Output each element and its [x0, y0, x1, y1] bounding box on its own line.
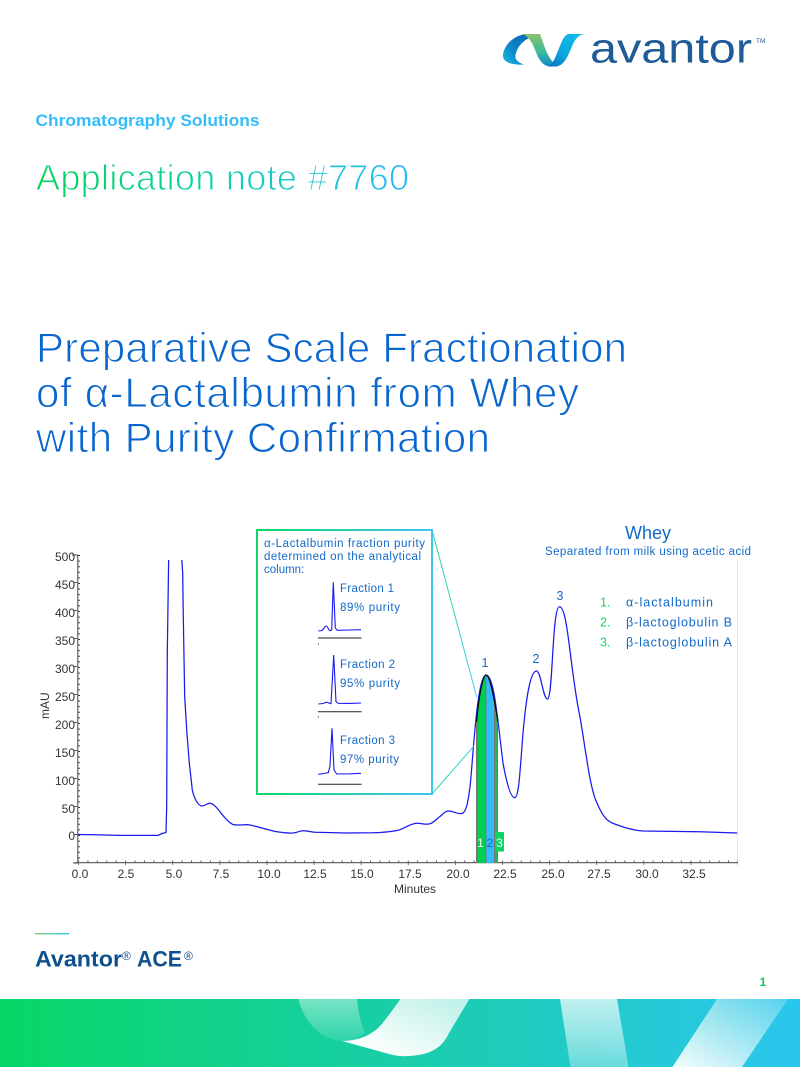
y axis labels	[55, 550, 75, 843]
y axis labels: 400	[55, 606, 75, 620]
fraction 3 text: 97% purity	[340, 754, 399, 766]
x axis labels: 12.5	[303, 867, 327, 881]
x axis labels: 27.5	[587, 867, 611, 881]
y axis labels: 450	[55, 578, 75, 592]
brand: Avantor ACE: Avantor	[35, 946, 122, 972]
fraction 2 text: Fraction 2	[340, 659, 395, 671]
heading: Application note: Application note #7760	[36, 157, 409, 198]
x axis labels: 0.0	[72, 867, 89, 881]
logo: avantor	[503, 24, 765, 72]
logo wordmark: avantor	[590, 24, 752, 72]
x axis title: Minutes	[394, 882, 436, 896]
page number: 1	[760, 975, 767, 989]
chart heading: Whey: Whey	[625, 523, 671, 543]
y axis title: mAU	[38, 692, 52, 719]
x axis labels: 2.5	[118, 867, 135, 881]
y axis labels: 300	[55, 662, 75, 676]
callout connector lines	[432, 530, 477, 794]
fraction labels: 2	[487, 836, 494, 850]
panel: fraction purity inset	[257, 530, 477, 794]
peak outline	[476, 675, 498, 722]
y axis labels: 100	[55, 774, 75, 788]
peak labels	[482, 589, 564, 670]
inset frame	[257, 530, 432, 794]
y axis labels: 0	[68, 829, 75, 843]
legend: β-lactoglobulin B	[626, 616, 732, 630]
chart subheading: Separated from milk using acetic acid	[545, 546, 751, 558]
inset heading: α-Lactalbumin fraction purity	[264, 538, 425, 550]
y axis labels: 250	[55, 690, 75, 704]
y axis labels: 500	[55, 550, 75, 564]
x axis labels: 17.5	[398, 867, 422, 881]
fraction labels	[477, 832, 504, 852]
plot right border	[736, 560, 738, 861]
fraction 2 chromatogram	[318, 655, 362, 718]
peak labels: 3	[557, 589, 564, 603]
brand: Avantor ACE	[35, 946, 193, 972]
fraction 2 text: 95% purity	[340, 678, 400, 690]
fraction 1 chromatogram	[318, 582, 362, 645]
fraction 2 text	[340, 659, 400, 690]
fraction 3 text	[340, 735, 399, 766]
x axis labels: 30.0	[635, 867, 659, 881]
fraction 1 text	[340, 583, 400, 614]
y axis	[72, 555, 79, 863]
x axis labels: 7.5	[213, 867, 230, 881]
fraction 1 text: Fraction 1	[340, 583, 394, 595]
fraction 1 text: 89% purity	[340, 602, 400, 614]
title	[35, 324, 627, 461]
title: with Purity Confirmation	[35, 414, 490, 461]
icon: avantor ribbon mark	[503, 34, 584, 66]
trademark: TM	[756, 38, 765, 45]
x axis labels: 20.0	[446, 867, 470, 881]
footer ribbon shapes	[298, 999, 788, 1067]
x axis labels: 15.0	[350, 867, 374, 881]
y axis labels: 200	[55, 718, 75, 732]
fraction 3 text: Fraction 3	[340, 735, 395, 747]
peak labels: 1	[482, 656, 489, 670]
legend: 3.	[600, 636, 610, 650]
chart: whey chromatogram	[38, 550, 738, 896]
inset heading	[264, 538, 425, 576]
inset heading: determined on the analytical	[264, 551, 421, 563]
chromatogram trace	[78, 556, 737, 835]
title: Preparative Scale Fractionation	[36, 324, 627, 371]
x axis labels: 22.5	[493, 867, 517, 881]
legend: 1.	[600, 596, 610, 610]
x axis labels: 32.5	[682, 867, 706, 881]
fraction labels: 1	[477, 836, 484, 850]
legend: 2.	[600, 616, 610, 630]
brand: Avantor ACE: ACE	[137, 946, 182, 972]
footer band	[0, 999, 800, 1067]
inset heading: column:	[264, 564, 304, 576]
brand: Avantor ACE: ®	[122, 949, 131, 963]
title: of α-Lactalbumin from Whey	[36, 369, 579, 416]
y axis labels: 150	[55, 746, 75, 760]
x axis labels: 5.0	[166, 867, 183, 881]
brand: Avantor ACE: ®	[184, 949, 193, 963]
x axis labels: 25.0	[541, 867, 565, 881]
legend	[600, 596, 733, 650]
legend: β-lactoglobulin A	[626, 636, 733, 650]
x axis labels	[72, 867, 706, 881]
fraction shading	[476, 670, 498, 863]
y axis labels: 50	[62, 802, 75, 816]
legend: α-lactalbumin	[626, 596, 713, 610]
brand accent rule	[35, 933, 69, 934]
fraction 3 chromatogram	[318, 728, 362, 784]
y axis labels: 350	[55, 634, 75, 648]
eyebrow: Chromatography Solutions: Chromatography Solutions	[36, 111, 260, 130]
x axis	[75, 861, 738, 864]
peak labels: 2	[533, 652, 540, 666]
fraction 3 tag: 3	[496, 836, 503, 850]
x axis labels: 10.0	[257, 867, 281, 881]
